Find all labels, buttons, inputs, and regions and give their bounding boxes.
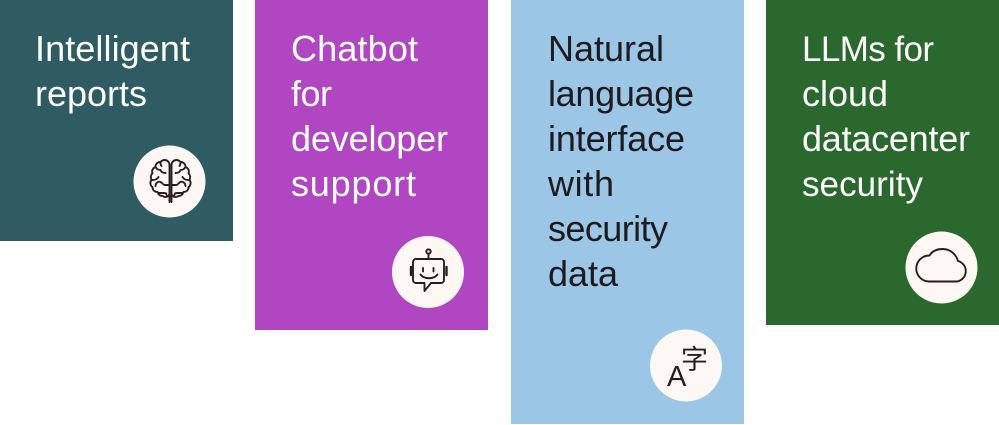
heading: chatbot for developer support: Chatbot [291,28,418,69]
heading: natural language interface with security data: data [548,253,619,294]
heading: natural language interface with security data: with [547,163,614,204]
heading: LLMs for cloud datacenter security: security [802,165,924,204]
icon: cloud [906,232,978,304]
heading: LLMs for cloud datacenter security: LLMs for [802,30,934,69]
heading: natural language interface with security data: Natural [548,28,664,69]
heading: chatbot for developer support: developer [291,118,448,159]
heading: natural language interface with security data [547,28,694,294]
heading: natural language interface with security data: interface [548,118,685,159]
icon: translate: 字 [681,345,708,375]
heading: intelligent reports [35,28,190,114]
heading: chatbot for developer support: for [291,73,332,114]
panel: intelligent reports [0,0,233,241]
panel: chatbot for developer support [255,0,488,330]
heading: LLMs for cloud datacenter security [802,30,970,204]
icon: chatbot [392,236,464,308]
heading: natural language interface with security data: language [548,73,694,114]
heading: chatbot for developer support [291,28,448,204]
heading: LLMs for cloud datacenter security: datacenter [802,118,970,159]
heading: LLMs for cloud datacenter security: cloud [802,73,888,114]
heading: chatbot for developer support: support [291,163,416,204]
heading: natural language interface with security data: security [548,208,668,249]
heading: intelligent reports: Intelligent [35,28,190,69]
icon: translate [650,330,722,402]
panel: natural language interface [511,0,744,424]
icon: translate: A [667,361,687,393]
heading: intelligent reports: reports [35,73,147,114]
panel: LLMs for cloud datacenter security [766,0,999,325]
icon: brain [134,146,206,218]
